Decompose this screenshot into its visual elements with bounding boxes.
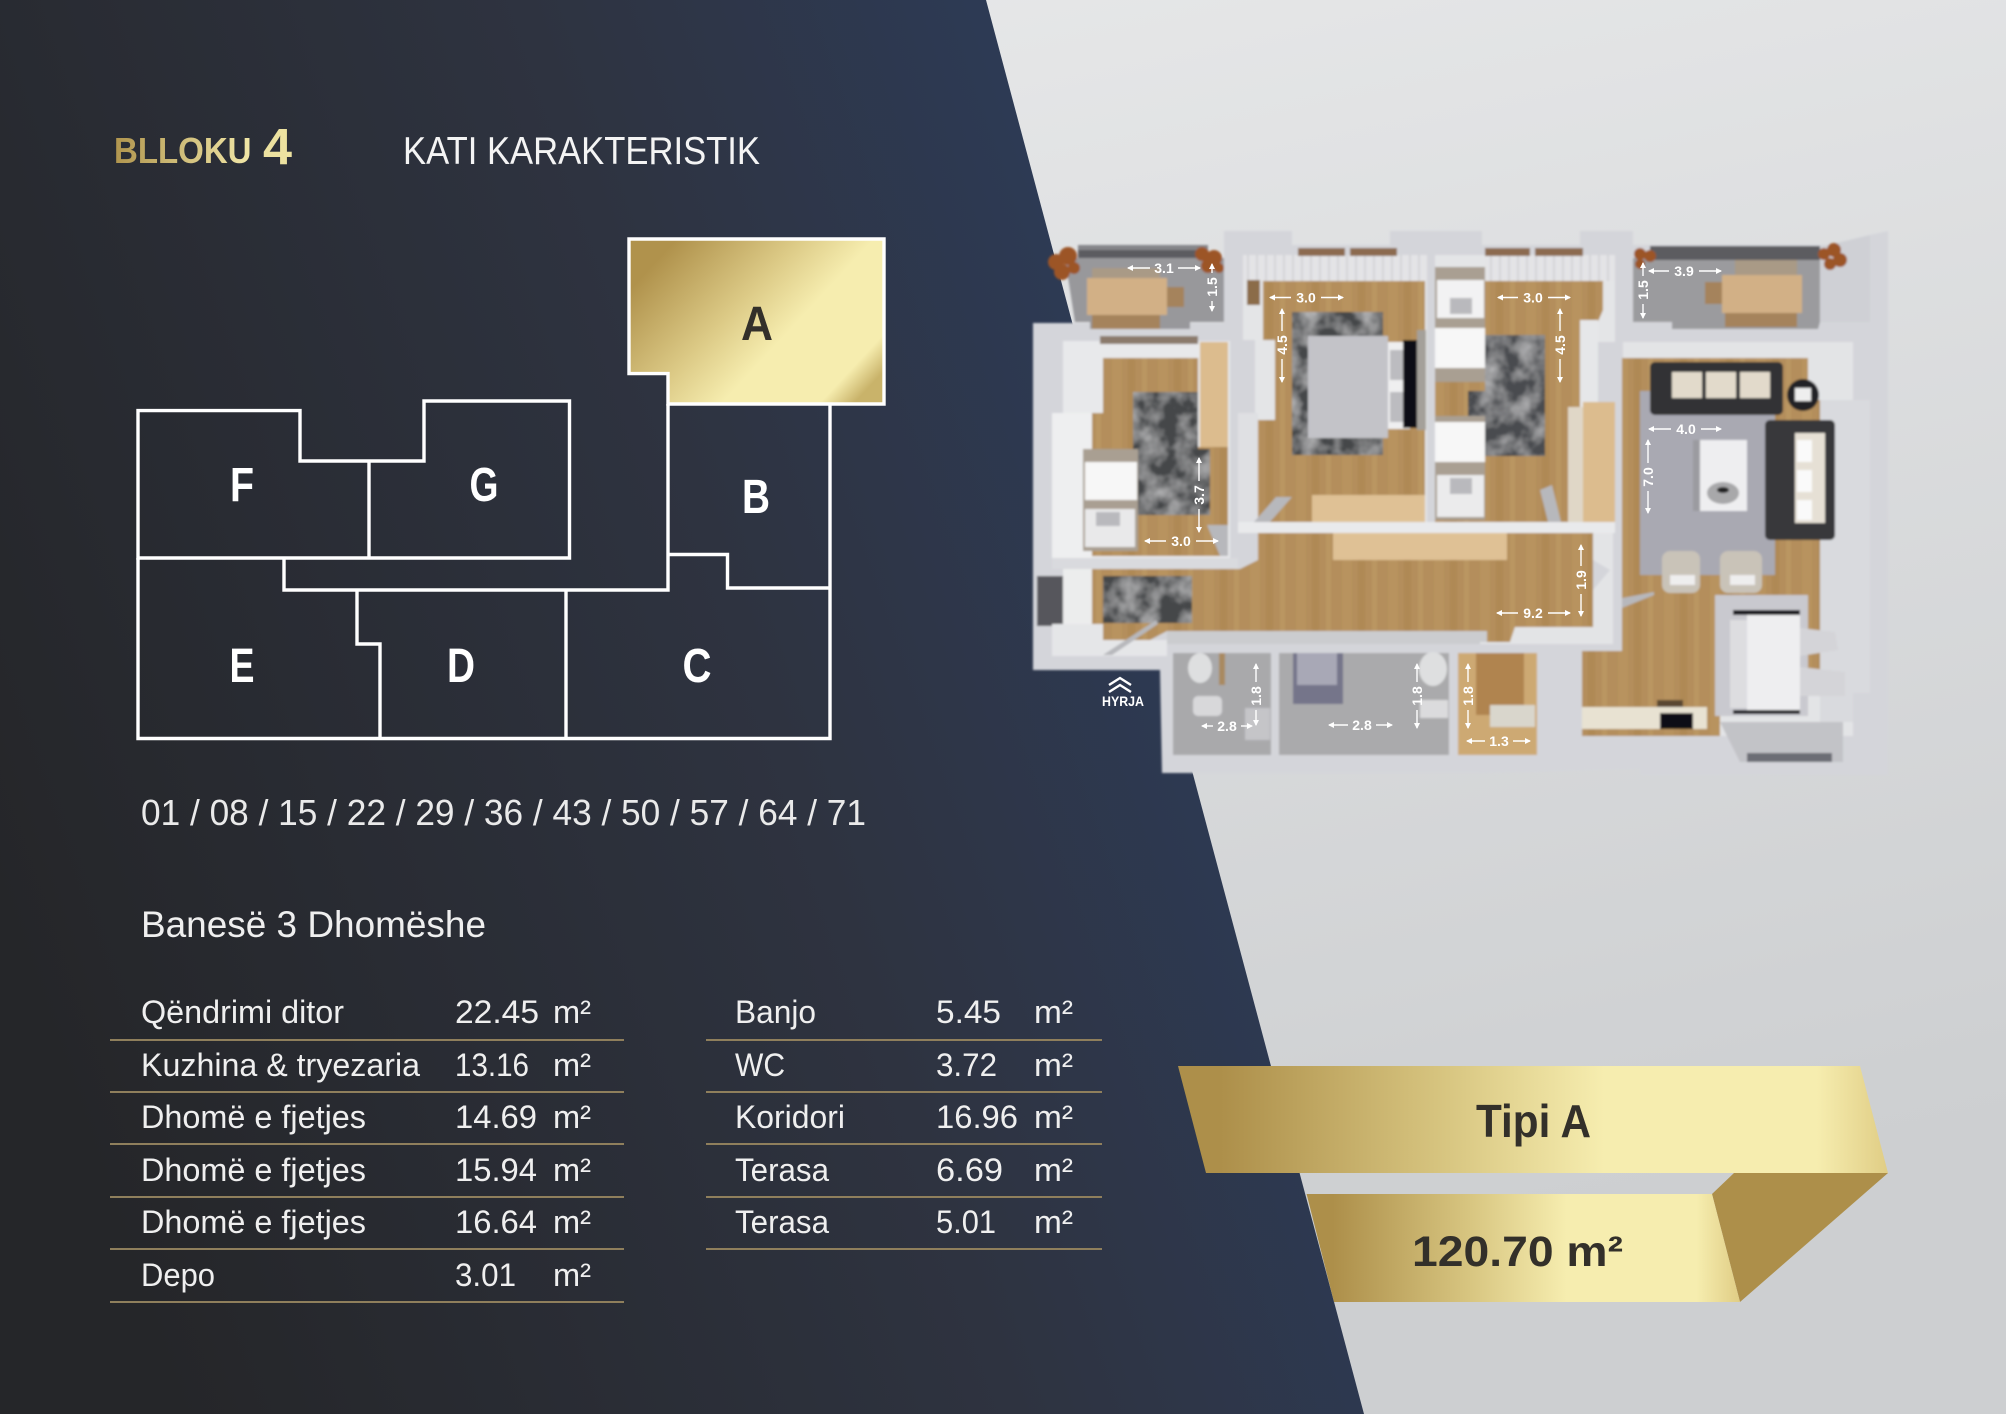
master bedroom (1233, 248, 1427, 522)
total area label: 120.70 m² (1412, 1228, 1623, 1276)
dimension labels: 2.8 (1217, 718, 1237, 734)
right terrace (1633, 235, 1870, 329)
area table: left column: Qëndrimi ditor (141, 994, 344, 1030)
unit labels: E (230, 640, 254, 693)
dimension labels: 3.0 (1296, 290, 1316, 306)
dimension labels: 4.5 (1274, 335, 1290, 355)
bedroom 1 (1052, 336, 1230, 558)
entrance marker (1102, 678, 1144, 709)
dimension labels: 1.8 (1248, 686, 1264, 706)
area table: right column: Terasa (735, 1204, 829, 1240)
gold ribbon badge (1178, 1066, 1888, 1302)
area table: left column: 22.45 (455, 994, 539, 1030)
type label: Tipi A (1476, 1095, 1591, 1147)
unit labels: C (682, 640, 712, 693)
plan drawing (1033, 231, 1888, 775)
left terrace (1048, 245, 1224, 329)
area table: left column: m² (553, 1257, 591, 1293)
unit outlines B to G (138, 401, 830, 738)
area table: right column: Koridori (735, 1099, 845, 1135)
entrance marker: HYRJA (1102, 693, 1144, 709)
title: blloku 4: 4 (263, 118, 293, 175)
dimension labels (1128, 260, 1721, 749)
unit labels: A (741, 298, 773, 351)
bathrooms (1173, 652, 1537, 755)
area table: left column: Dhomë e fjetjes (141, 1152, 366, 1188)
area table: left column: m² (553, 1204, 591, 1240)
area table: right column: 5.01 (936, 1204, 996, 1240)
area table: right column (706, 994, 1102, 1250)
background: dark diagonal panel (0, 0, 1364, 1414)
area table: left column: Depo (141, 1257, 215, 1293)
dimension labels: 9.2 (1523, 605, 1543, 621)
area table: left column: Dhomë e fjetjes (141, 1099, 366, 1135)
area table: right column: WC (735, 1047, 785, 1083)
area table: left column: m² (553, 1047, 591, 1083)
area table: right column: m² (1034, 1204, 1073, 1240)
heading: kati karakteristik: KATI KARAKTERISTIK (403, 130, 760, 173)
dimension labels: 7.0 (1640, 467, 1656, 487)
area table: right column: 3.72 (936, 1047, 997, 1083)
area table: left column: 14.69 (455, 1099, 537, 1135)
corridor (1037, 522, 1615, 656)
area table: left column: 16.64 (455, 1204, 537, 1240)
dimension labels: 4.5 (1552, 335, 1568, 355)
unit labels: F (230, 459, 254, 512)
area table: left column: Kuzhina & tryezaria (141, 1047, 420, 1083)
area table: right column: m² (1034, 1152, 1073, 1188)
area table: left column: m² (553, 1152, 591, 1188)
title: blloku 4: BLLOKU (114, 130, 252, 171)
dimension labels: 1.8 (1460, 686, 1476, 706)
area table: right column: m² (1034, 1099, 1073, 1135)
area table: left column (110, 994, 624, 1303)
unit labels: G (470, 459, 498, 512)
ribbon: type band (1178, 1066, 1888, 1173)
area table: right column: m² (1034, 994, 1073, 1030)
dimension labels: 1.5 (1635, 280, 1651, 300)
unit labels: D (447, 640, 475, 693)
dimension labels: 3.0 (1171, 533, 1191, 549)
walls (1033, 231, 1888, 775)
unit labels: B (742, 471, 770, 524)
dimension labels: 3.9 (1674, 263, 1694, 279)
area table: right column: Terasa (735, 1152, 829, 1188)
dimension labels: 2.8 (1352, 717, 1372, 733)
twin bedroom (1435, 248, 1615, 522)
apartment numbers: 01 / 08 / 15 / 22 / 29 / 36 / 43 / 50 / 57 / 64 / 71 (141, 792, 866, 833)
area table: right column: 16.96 (936, 1099, 1018, 1135)
area table: left column: Dhomë e fjetjes (141, 1204, 366, 1240)
area table: left column: 15.94 (455, 1152, 537, 1188)
area table: right column: Banjo (735, 994, 816, 1030)
area table: left column: m² (553, 1099, 591, 1135)
area table: right column: 6.69 (936, 1152, 1003, 1188)
unit labels (230, 298, 773, 693)
dimension labels: 3.0 (1523, 290, 1543, 306)
area table: right column: 5.45 (936, 994, 1001, 1030)
dimension labels: 1.5 (1204, 277, 1220, 297)
dimension labels: 3.7 (1191, 485, 1207, 505)
dimension labels: 3.1 (1154, 260, 1174, 276)
area table: left column: m² (553, 994, 591, 1030)
dimension labels: 4.0 (1676, 421, 1696, 437)
area table: right column: m² (1034, 1047, 1073, 1083)
subheading: apartment type: Banesë 3 Dhomëshe (141, 904, 486, 945)
dimension labels: 1.9 (1573, 570, 1589, 590)
unit A highlighted (629, 239, 884, 404)
area table: left column: 3.01 (455, 1257, 516, 1293)
dimension labels: 1.8 (1409, 686, 1425, 706)
ribbon fold (1712, 1173, 1888, 1302)
ribbon: area band (1307, 1194, 1740, 1302)
area table: left column: 13.16 (455, 1047, 529, 1083)
floor key plan (138, 239, 884, 738)
dimension labels: 1.3 (1489, 733, 1509, 749)
apartment floor plan (1033, 231, 1888, 775)
living room and kitchen (1582, 342, 1870, 762)
title: blloku 4 (114, 118, 293, 175)
